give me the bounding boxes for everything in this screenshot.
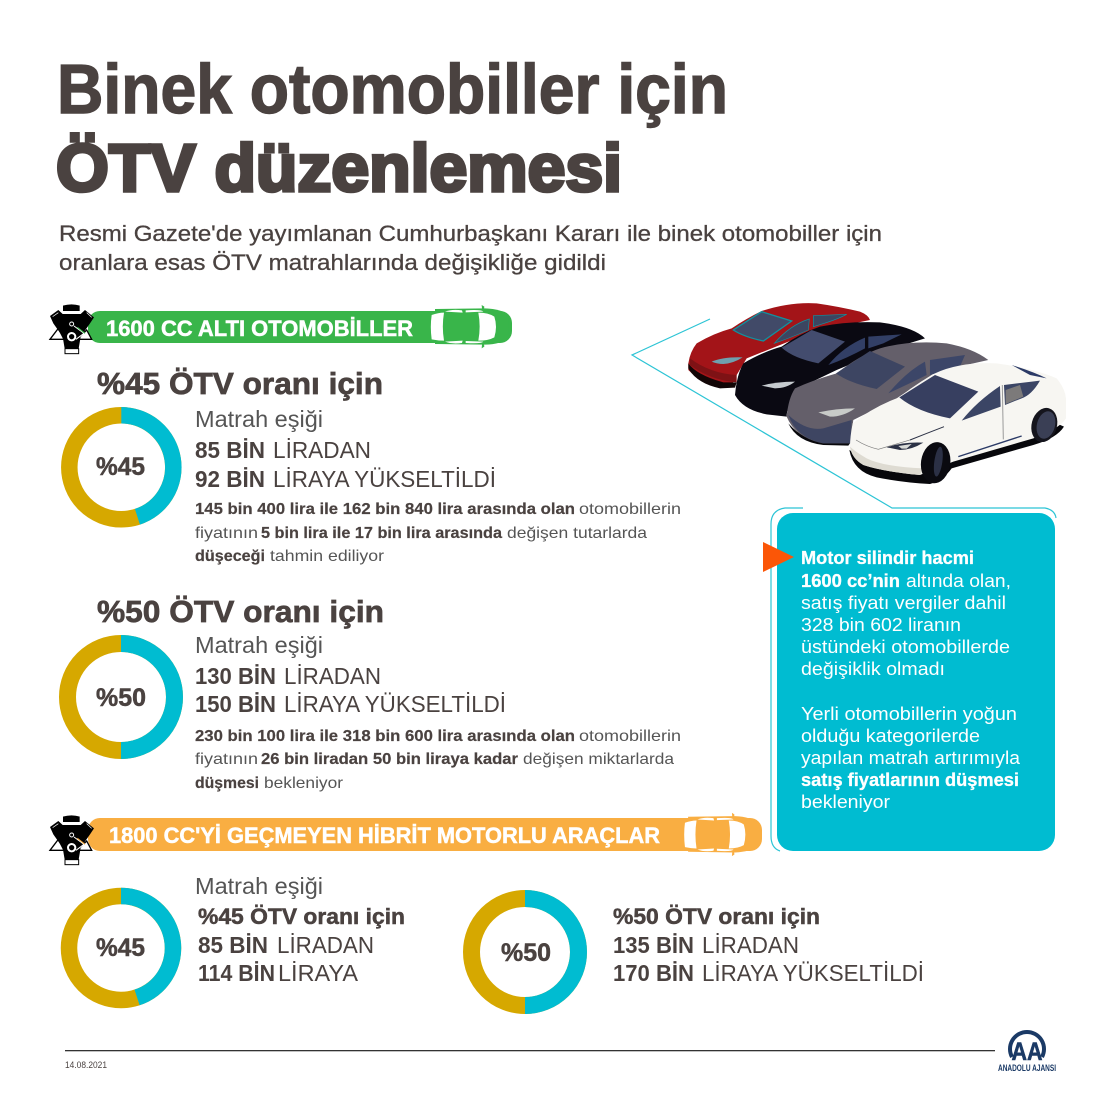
text block: %45 threshold: LİRADAN <box>273 437 371 463</box>
text block: %50 threshold: fiyatının <box>195 751 258 768</box>
donut: hybrid %50 <box>472 898 578 1006</box>
panel text: Motor silindir hacmi <box>801 548 974 568</box>
donut: %45: %45 <box>96 453 145 481</box>
text block: %45 threshold: tahmin ediliyor <box>270 548 385 565</box>
panel text: altında olan, <box>906 571 1011 591</box>
panel text: 328 bin 602 liranın <box>801 615 961 635</box>
heading: %45: %45 ÖTV oranı için <box>97 366 383 401</box>
panel text: üstündeki otomobillerde <box>801 637 1010 657</box>
logo: Anadolu Ajansı: AA <box>1012 1038 1042 1066</box>
icon: engine <box>50 815 94 865</box>
icon: car top view <box>684 813 757 856</box>
panel text <box>801 548 1021 812</box>
text block: %50 threshold: 130 BİN <box>195 663 276 689</box>
title <box>56 50 728 206</box>
text block: %45 threshold: değişen tutarlarda <box>507 525 647 542</box>
illustration: four cars <box>688 303 1066 485</box>
text block: hybrid %50: LİRADAN <box>702 932 799 958</box>
text block: hybrid %50: %50 ÖTV oranı için <box>613 904 820 929</box>
text block: %50 threshold: 150 BİN <box>195 691 276 717</box>
text block: hybrid %50: 170 BİN <box>613 960 694 986</box>
text block: %45 threshold <box>195 406 681 565</box>
text block: %45 threshold: 85 BİN <box>195 437 265 463</box>
text block: hybrid %45: 114 BİN <box>198 960 275 986</box>
panel text: yapılan matrah artırımıyla <box>801 748 1021 768</box>
text block: %50 threshold: LİRADAN <box>284 663 381 689</box>
text block: hybrid %45: LİRADAN <box>277 932 374 958</box>
icon: car top view <box>431 305 508 348</box>
text block: %45 threshold: 145 bin 400 lira ile 162 bin 840 lira arasında olan <box>195 501 575 518</box>
panel text: olduğu kategorilerde <box>801 726 980 746</box>
red car <box>688 303 870 388</box>
panel: info box <box>763 513 1055 851</box>
panel text: değişiklik olmadı <box>801 659 945 679</box>
donut: %45 <box>69 415 173 519</box>
banner: 1800 cc hybrid <box>88 813 762 856</box>
text block: hybrid %45: Matrah eşiği <box>195 873 323 899</box>
text block: %45 threshold: 92 BİN <box>195 466 265 492</box>
panel text: satış fiyatlarının düşmesi <box>801 770 1019 790</box>
date: 14.08.2021 <box>65 1060 107 1071</box>
footer rule <box>65 1050 995 1051</box>
text block: hybrid %45: 85 BİN <box>198 932 268 958</box>
panel text: satış fiyatı vergiler dahil <box>801 593 1006 613</box>
subtitle: oranlara esas ÖTV matrahlarında değişikliğe gidildi <box>59 250 606 275</box>
text block: %45 threshold: Matrah eşiği <box>195 406 323 432</box>
heading: %50: %50 ÖTV oranı için <box>97 594 384 629</box>
text block: hybrid %50: LİRAYA YÜKSELTİLDİ <box>702 960 924 986</box>
white car <box>849 363 1066 485</box>
panel text: 1600 cc’nin <box>801 571 900 591</box>
text block: %50 threshold <box>195 632 681 792</box>
black car <box>735 322 925 417</box>
donut: hybrid %50: %50 <box>501 939 551 967</box>
grey car <box>787 342 988 446</box>
subtitle: Resmi Gazete'de yayımlanan Cumhurbaşkanı Kararı ile binek otomobiller için <box>59 221 882 246</box>
text block: hybrid %45 <box>195 873 405 986</box>
donut: hybrid %45: %45 <box>96 934 145 962</box>
text block: %50 threshold: 230 bin 100 lira ile 318 bin 600 lira arasında olan <box>195 728 575 745</box>
text block: hybrid %45: %45 ÖTV oranı için <box>198 904 405 929</box>
text block: hybrid %50: 135 BİN <box>613 932 694 958</box>
banner: 1600 cc: 1600 CC ALTI OTOMOBİLLER <box>106 316 413 341</box>
subtitle <box>59 221 882 275</box>
text block: %50 threshold: düşmesi <box>195 775 259 792</box>
connector line <box>632 319 1056 851</box>
text block: %50 threshold: bekleniyor <box>264 775 344 792</box>
text block: %50 threshold: Matrah eşiği <box>195 632 323 658</box>
donut: %50 <box>68 644 174 750</box>
text block: %50 threshold: LİRAYA YÜKSELTİLDİ <box>284 691 506 717</box>
text block: %45 threshold: LİRAYA YÜKSELTİLDİ <box>273 466 496 492</box>
text block: %45 threshold: 5 bin lira ile 17 bin lira arasında <box>261 525 502 542</box>
banner: 1800 cc hybrid: 1800 CC'Yİ GEÇMEYEN HİBRİT MOTORLU ARAÇLAR <box>109 823 660 848</box>
title: Binek otomobiller için <box>57 50 728 128</box>
panel text: Yerli otomobillerin yoğun <box>801 704 1017 724</box>
text block: %45 threshold: düşeceği <box>195 548 265 565</box>
logo: Anadolu Ajansı: ANADOLU AJANSI <box>998 1063 1056 1073</box>
panel text: bekleniyor <box>801 792 890 812</box>
donut: hybrid %45 <box>69 896 173 1000</box>
text block: %50 threshold: otomobillerin <box>579 728 681 745</box>
text block: %45 threshold: otomobillerin <box>579 501 681 518</box>
logo: Anadolu Ajansı <box>998 1032 1056 1073</box>
donut: %50: %50 <box>96 684 146 712</box>
text block: %45 threshold: fiyatının <box>195 525 258 542</box>
text block: %50 threshold: 26 bin liradan 50 bin liraya kadar <box>261 751 518 768</box>
banner: 1600 cc <box>88 305 512 348</box>
text block: hybrid %50 <box>613 904 924 986</box>
title: ÖTV düzenlemesi <box>56 131 622 206</box>
text block: hybrid %45: LİRAYA <box>278 960 359 986</box>
text block: %50 threshold: değişen miktarlarda <box>523 751 674 768</box>
icon: engine <box>50 304 94 354</box>
icon: orange arrow <box>763 542 794 572</box>
